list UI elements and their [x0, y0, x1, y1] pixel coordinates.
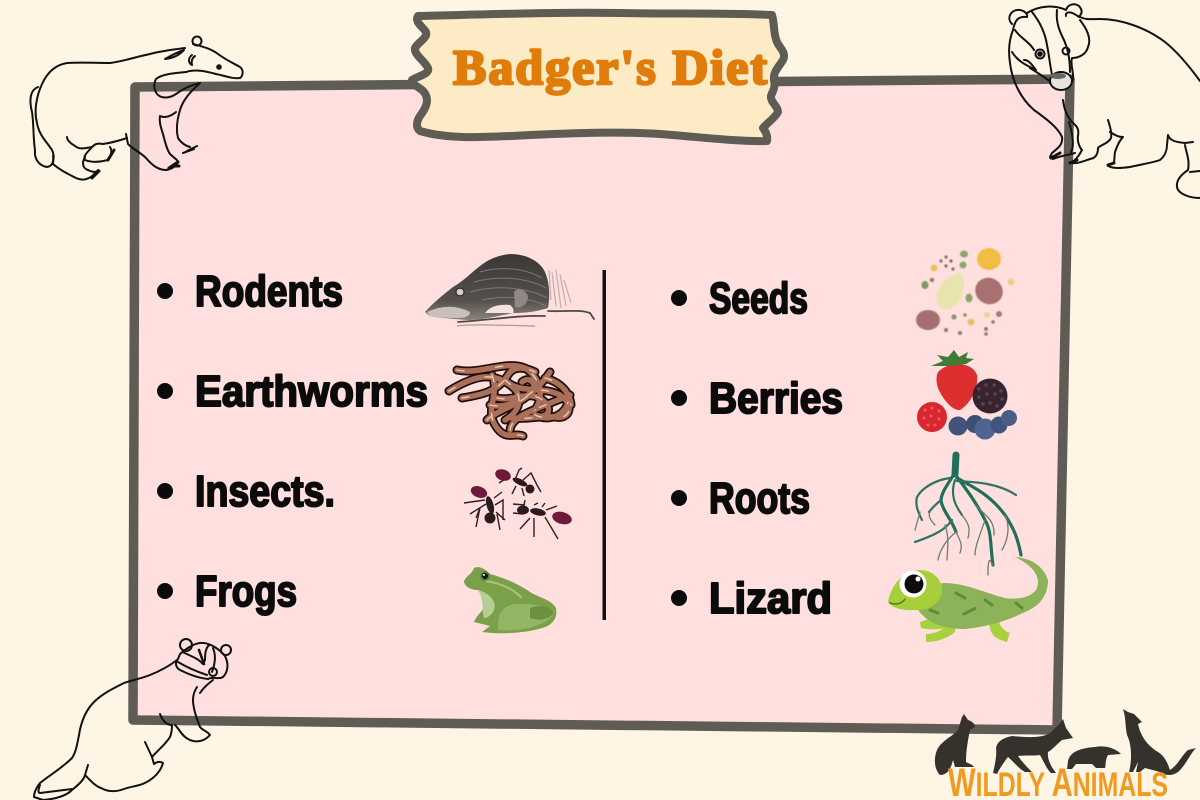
ant top: [494, 467, 541, 496]
lizard body: [915, 557, 1048, 629]
animal silhouettes: [935, 709, 1196, 775]
badger outline: top left: [30, 36, 243, 180]
icon: lizard: [888, 557, 1048, 642]
center divider: [602, 270, 606, 620]
list item: Seeds: [671, 274, 808, 323]
icon: roots: [915, 455, 1021, 575]
list item: Lizard: Lizard: [709, 574, 832, 623]
list item: Frogs: Frogs: [195, 567, 297, 616]
list item: Roots: [671, 474, 810, 523]
list item: Berries: Berries: [709, 374, 843, 423]
left food list: [157, 267, 428, 616]
badger outline: top right: [1009, 4, 1200, 198]
list item: Rodents: Rodents: [195, 267, 343, 316]
list item: Insects: Insects.: [195, 467, 335, 516]
ant left: [464, 484, 505, 530]
icon: ants: [464, 467, 573, 539]
panel: diet card: [133, 79, 1070, 730]
lizard legs: [920, 610, 1010, 642]
icon: frog: [464, 567, 556, 633]
logo: Wildly Animals: [935, 709, 1196, 800]
icon: berries: [917, 350, 1017, 440]
icon: earthworms: [449, 366, 571, 436]
icon: rodent: [425, 254, 594, 326]
title text: Badger's Diet: [453, 39, 767, 95]
list item: Roots: Roots: [709, 474, 810, 523]
list item: Seeds: Seeds: [709, 274, 808, 323]
banner shape: [412, 13, 784, 141]
list item: Insects: [157, 467, 335, 516]
right food list: [671, 274, 843, 623]
badger outline: bottom left: [34, 639, 231, 800]
list item: Earthworms: Earthworms: [195, 367, 428, 416]
list item: Rodents: [157, 267, 343, 316]
icon: seeds: [916, 248, 1014, 336]
lizard head: [888, 570, 942, 610]
title banner: [412, 13, 784, 141]
ant right: [513, 500, 573, 539]
list item: Frogs: [157, 567, 297, 616]
